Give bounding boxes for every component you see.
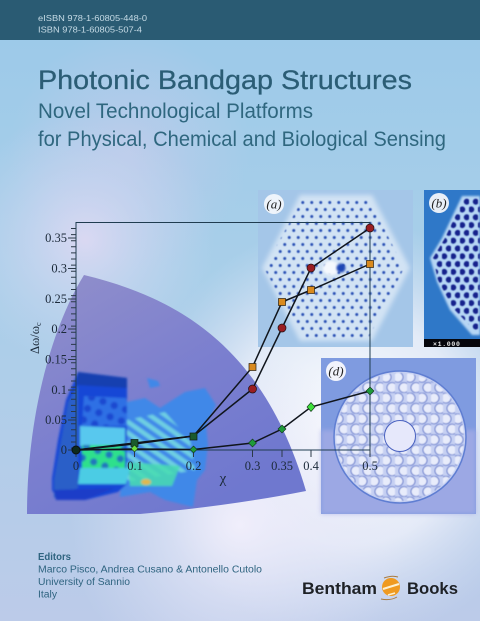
y axis labels: 0.15 [45, 352, 67, 366]
micrograph panel b [424, 190, 480, 348]
red series [76, 224, 374, 450]
x axis labels: 0.35 [271, 459, 293, 473]
subtitle: Novel Technological Platforms [38, 100, 313, 123]
x axis labels [73, 459, 378, 473]
x axis labels: 0 [73, 459, 79, 473]
editors: Italy [38, 590, 57, 600]
y axis labels: 0.05 [45, 413, 67, 427]
label b [429, 193, 449, 213]
origin marker [72, 446, 80, 454]
field blob [52, 372, 216, 507]
title: Photonic Bandgap Structures [38, 65, 412, 95]
orange series [76, 260, 374, 450]
label a: (a) [266, 196, 282, 212]
y axis ticks [68, 228, 370, 457]
y axis labels: 0.1 [51, 383, 67, 397]
subtitle: for Physical, Chemical and Biological Sensing [38, 128, 446, 151]
x axis labels: 0.3 [245, 459, 260, 473]
fan-shaped simulation [27, 275, 306, 514]
ISBN text: eISBN 978-1-60805-448-0 [38, 13, 147, 23]
y axis title: c [34, 322, 43, 326]
line chart [28, 222, 378, 487]
y axis title: Δω/ω [28, 326, 42, 354]
subtitle [38, 100, 446, 151]
label a [264, 194, 284, 214]
x axis labels: 0.5 [362, 459, 378, 473]
micrograph panel a [258, 190, 413, 347]
y axis labels: 0.3 [51, 262, 67, 276]
label d: (d) [328, 364, 344, 378]
y axis labels: 0.35 [45, 231, 67, 245]
publisher logo: Bentham [302, 580, 377, 598]
green series [76, 387, 374, 453]
icon: orange e [381, 576, 400, 600]
y axis labels: 0.25 [45, 292, 67, 306]
ISBN text [38, 13, 147, 34]
editors [38, 552, 262, 600]
editors: Marco Pisco, Andrea Cusano & Antonello Cutolo [38, 564, 262, 576]
x axis labels: 0.2 [186, 459, 201, 473]
editors: Editors [38, 552, 71, 563]
y axis labels: 0 [61, 443, 67, 457]
editors: University of Sannio [38, 577, 130, 588]
x axis title: χ [219, 471, 227, 487]
y axis labels [45, 231, 67, 457]
chart frame [76, 222, 370, 450]
label b: (b) [431, 196, 447, 210]
y axis labels: 0.2 [51, 322, 67, 336]
scale label: ×1.000 [433, 341, 461, 348]
publisher logo [302, 576, 458, 600]
publisher logo: Books [407, 580, 458, 598]
defect [323, 261, 339, 275]
x axis labels: 0.4 [303, 459, 320, 473]
ISBN text: ISBN 978-1-60805-507-4 [38, 24, 142, 34]
micrograph panel d [321, 358, 476, 514]
x axis labels: 0.1 [127, 459, 143, 473]
header band [0, 0, 480, 40]
label d [326, 361, 346, 381]
